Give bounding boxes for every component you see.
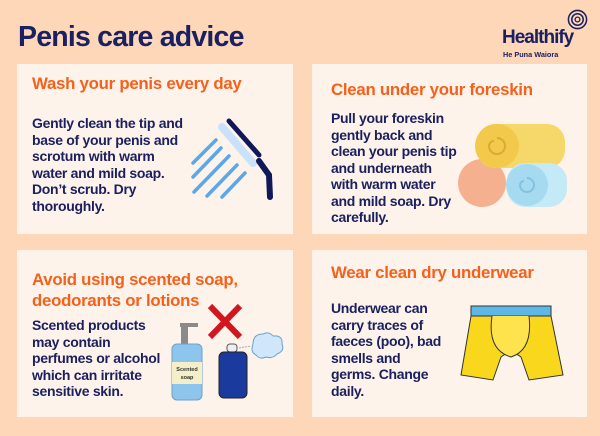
- text: gently back and: [331, 126, 432, 142]
- logo: Healthify: [502, 10, 588, 59]
- logo: Healthify: He Puna Waiora: [503, 50, 558, 59]
- panel: scented: [17, 250, 293, 417]
- text: and mild soap. Dry: [331, 192, 451, 208]
- text: Pull your foreskin: [331, 110, 444, 126]
- text: [32, 317, 160, 399]
- text: carry traces of: [331, 316, 423, 332]
- text: base of your penis and: [32, 132, 178, 148]
- text: [32, 115, 183, 214]
- text: carefully.: [331, 209, 388, 225]
- text: smells and: [331, 350, 400, 366]
- icon: soap bottle: Scented: [176, 367, 198, 373]
- text: perfumes or alcohol: [32, 350, 160, 366]
- text: daily.: [331, 382, 364, 398]
- heading: Wear clean dry underwear: [331, 263, 534, 282]
- panel: foreskin: [312, 64, 587, 234]
- logo: Healthify: Healthify: [502, 27, 573, 48]
- text: sensitive skin.: [32, 383, 123, 399]
- text: clean your penis tip: [331, 143, 456, 159]
- icon: red cross: [208, 304, 242, 340]
- icon: towels: [458, 124, 567, 207]
- text: which can irritate: [32, 366, 142, 382]
- icon: shower head: [191, 118, 273, 200]
- icon: logo circle: [568, 10, 588, 30]
- icon: soap bottle: [172, 323, 202, 400]
- text: [331, 300, 441, 399]
- text: faeces (poo), bad: [331, 333, 441, 349]
- heading: Wash your penis every day: [32, 74, 242, 93]
- icon: soap bottle: soap: [181, 375, 194, 381]
- text: water and mild soap.: [32, 164, 164, 180]
- panel: wash: [17, 64, 293, 234]
- icon: spray can: [218, 332, 284, 398]
- text: may contain: [32, 334, 110, 350]
- title: Penis care advice: [18, 21, 244, 53]
- text: Underwear can: [331, 300, 427, 316]
- text: Scented products: [32, 317, 145, 333]
- heading: deodorants or lotions: [32, 291, 199, 310]
- text: Don’t scrub. Dry: [32, 181, 136, 197]
- text: thoroughly.: [32, 198, 105, 214]
- text: with warm water: [331, 176, 435, 192]
- heading: Clean under your foreskin: [331, 80, 533, 99]
- panel: underwear: [312, 250, 587, 417]
- text: and underneath: [331, 160, 432, 176]
- heading: [32, 270, 238, 310]
- icon: boxer shorts: [460, 306, 564, 380]
- text: Gently clean the tip and: [32, 115, 183, 131]
- heading: Avoid using scented soap,: [32, 270, 238, 289]
- text: scrotum with warm: [32, 148, 154, 164]
- text: [331, 110, 456, 225]
- text: germs. Change: [331, 366, 428, 382]
